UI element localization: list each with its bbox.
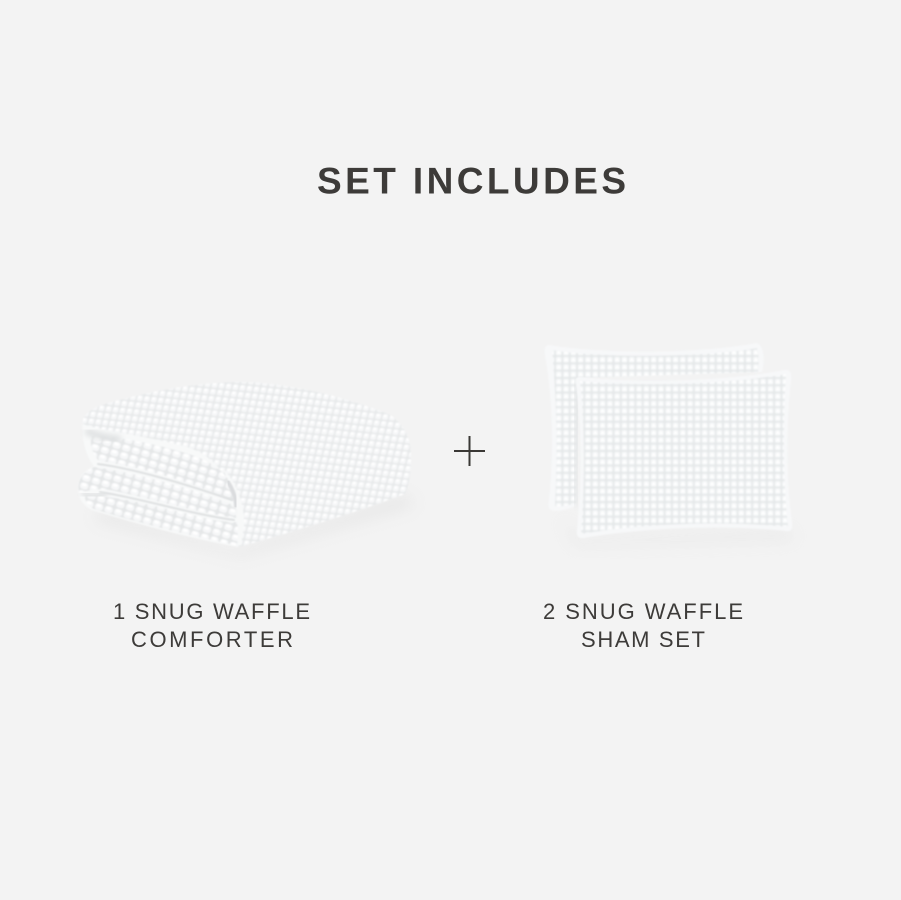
comforter: folded waffle blanket [78, 382, 415, 556]
comforter middle fold band [78, 467, 236, 518]
comforter silhouette base [78, 382, 411, 547]
comforter fold shadows [84, 432, 236, 520]
label: sham set: SHAM SET [581, 627, 705, 652]
label: comforter: 1 SNUG WAFFLE [113, 599, 310, 624]
plus sign [454, 436, 485, 466]
sham pillows [545, 343, 795, 546]
pillow ground shadow [560, 515, 795, 546]
front pillow [576, 370, 792, 538]
comforter top panel [83, 382, 411, 547]
comforter textured body [78, 382, 411, 547]
back pillow [545, 343, 764, 511]
label: sham set [543, 599, 743, 652]
comforter rounded fold edge [222, 468, 244, 546]
comforter ground shadow [95, 495, 415, 556]
back pillow shadow on edge [575, 380, 577, 506]
title: SET INCLUDES [317, 160, 626, 202]
comforter lower fold band [85, 496, 238, 546]
label: comforter [113, 599, 310, 652]
comforter upper fold band [91, 436, 238, 503]
label: sham set: 2 SNUG WAFFLE [543, 599, 743, 624]
label: comforter: COMFORTER [131, 627, 293, 652]
